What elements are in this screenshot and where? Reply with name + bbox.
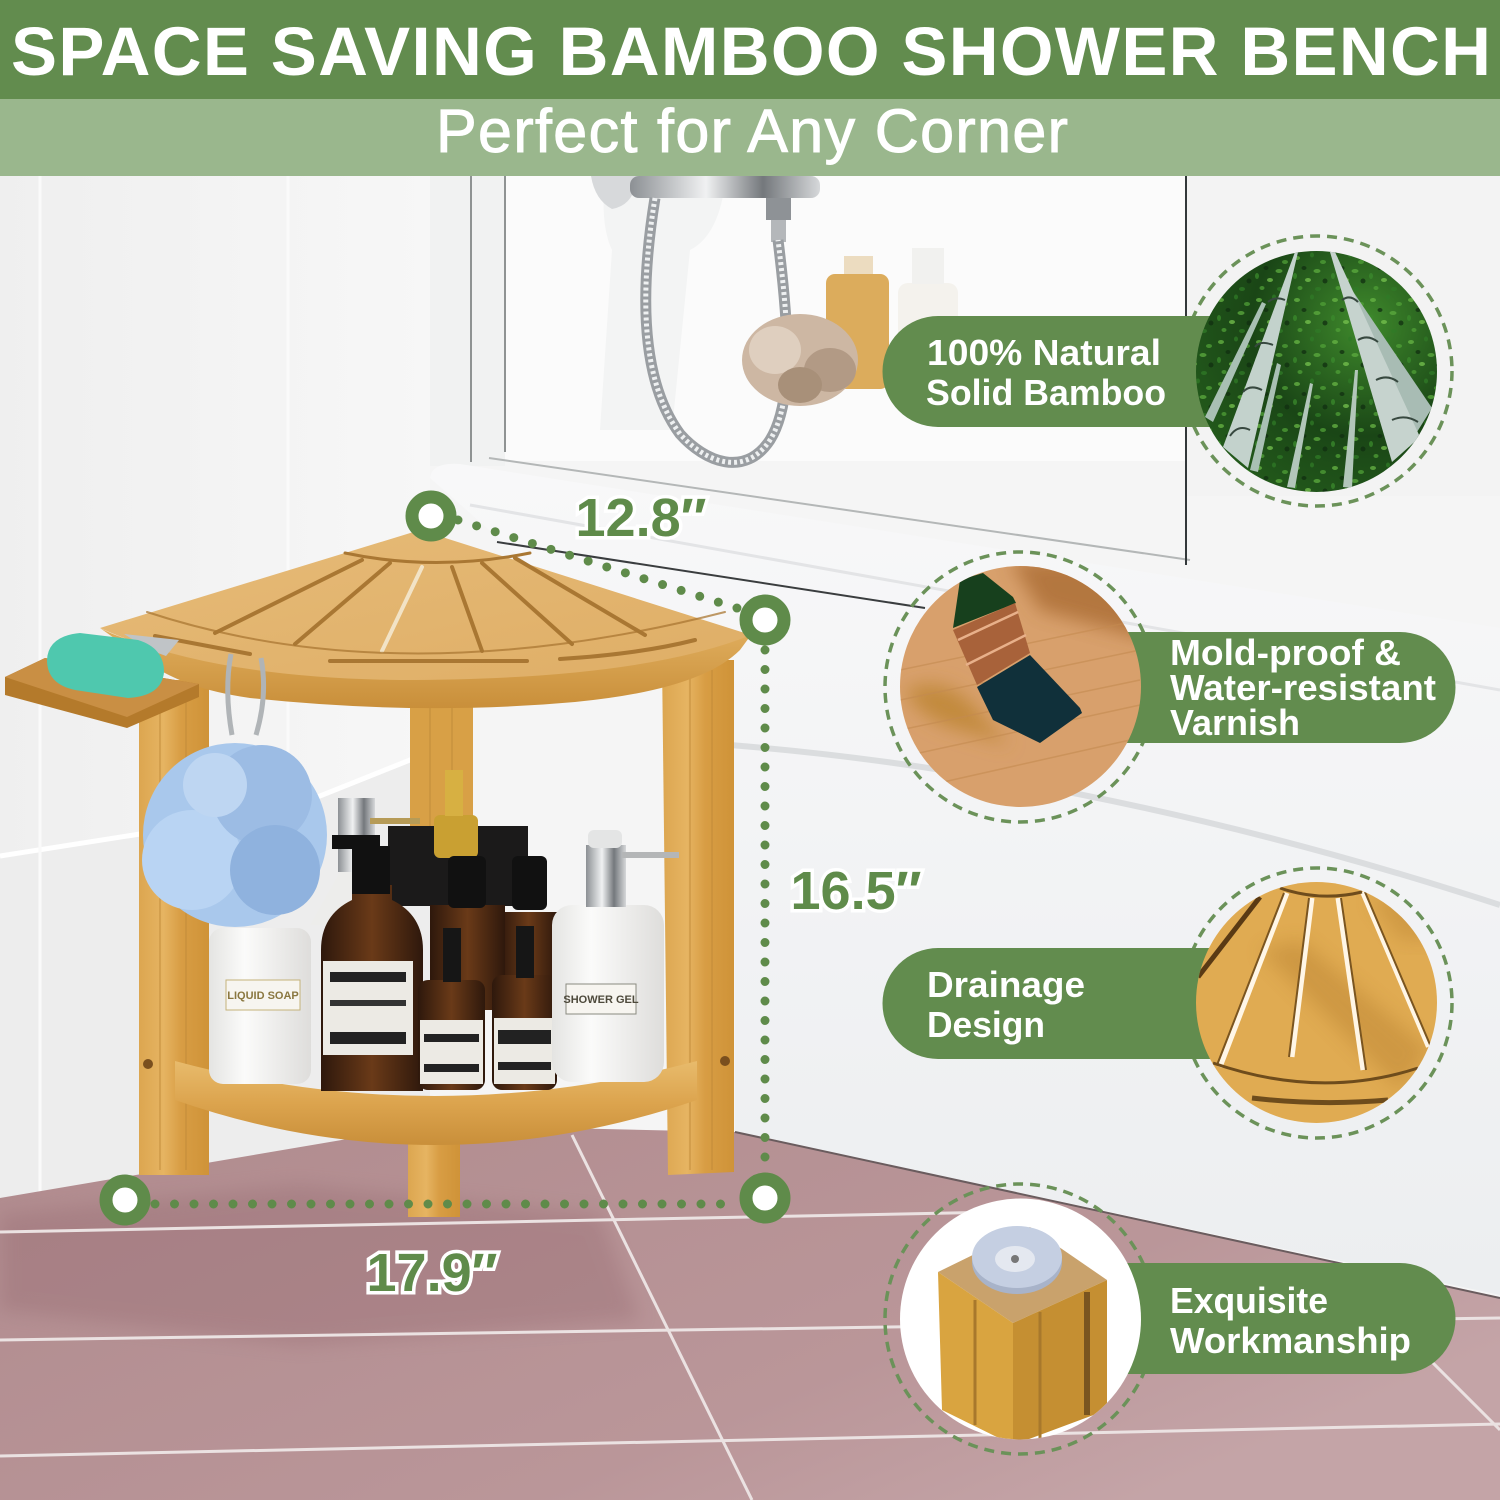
seat skirt (100, 628, 751, 708)
bench (5, 530, 751, 1217)
dimension: 12.8 inches (412, 488, 740, 609)
shelf bottles and sponge (742, 248, 958, 406)
floor (0, 1125, 1500, 1500)
dimension: 12.8 inches: 12.8″ (576, 488, 706, 548)
bottle: medium amber, centre (430, 856, 505, 1010)
bottle: large amber (321, 835, 423, 1091)
right leg (662, 660, 734, 1175)
bottle: liquid soap: LIQUID SOAP (227, 990, 299, 1002)
callout: workmanship (885, 1184, 1456, 1454)
callout: varnish: Mold-proof & (1170, 632, 1401, 673)
callout: workmanship: Workmanship (1170, 1320, 1411, 1361)
bottle: shower gel (552, 830, 679, 1082)
callout: workmanship: Exquisite (1170, 1280, 1328, 1321)
left leg (139, 680, 209, 1175)
dimension: 16.5 inches (746, 601, 921, 1217)
lower shelf (175, 1061, 697, 1145)
seat slats (147, 553, 725, 661)
bottle: rear silver pump (310, 798, 420, 925)
seat top (100, 530, 751, 680)
bottle: liquid soap (209, 928, 311, 1084)
back leg (410, 700, 473, 850)
black tray and gold pump (388, 770, 528, 906)
bottle: shower gel: SHOWER GEL (563, 994, 639, 1006)
callout: drainage: Drainage (927, 964, 1085, 1005)
bathtub (430, 464, 1500, 1295)
dimension: 17.9 inches (106, 1181, 735, 1303)
dimension: 17.9 inches: 17.9″ (367, 1243, 497, 1303)
icon: bamboo forest (1196, 250, 1438, 494)
faucet and hose (591, 176, 820, 462)
subtitle band (0, 97, 1500, 176)
callout: natural bamboo: 100% Natural (927, 332, 1161, 373)
callout: drainage: Design (927, 1004, 1045, 1045)
bottle: medium amber, right (500, 856, 557, 1010)
callout: varnish: Varnish (1170, 702, 1300, 743)
icon: brush on wood (900, 560, 1150, 785)
bottles: dropper amber (418, 926, 557, 1090)
callout: drainage (883, 868, 1452, 1138)
metal hook bracket and hooks (124, 634, 264, 735)
callout: natural bamboo (883, 236, 1452, 506)
soap dish (5, 658, 199, 728)
callout: varnish: Water-resistant (1170, 667, 1436, 708)
icon: drainage slats (1198, 888, 1440, 1103)
loofah (142, 743, 327, 927)
callout: varnish (885, 552, 1456, 822)
title band: SPACE SAVING BAMBOO SHOWER BENCH (11, 13, 1491, 90)
soap (47, 633, 164, 698)
dimension: 16.5 inches: 16.5″ (791, 861, 921, 921)
icon: bench foot (938, 1226, 1107, 1445)
callout: natural bamboo: Solid Bamboo (926, 372, 1166, 413)
subtitle band: Perfect for Any Corner (436, 97, 1068, 165)
